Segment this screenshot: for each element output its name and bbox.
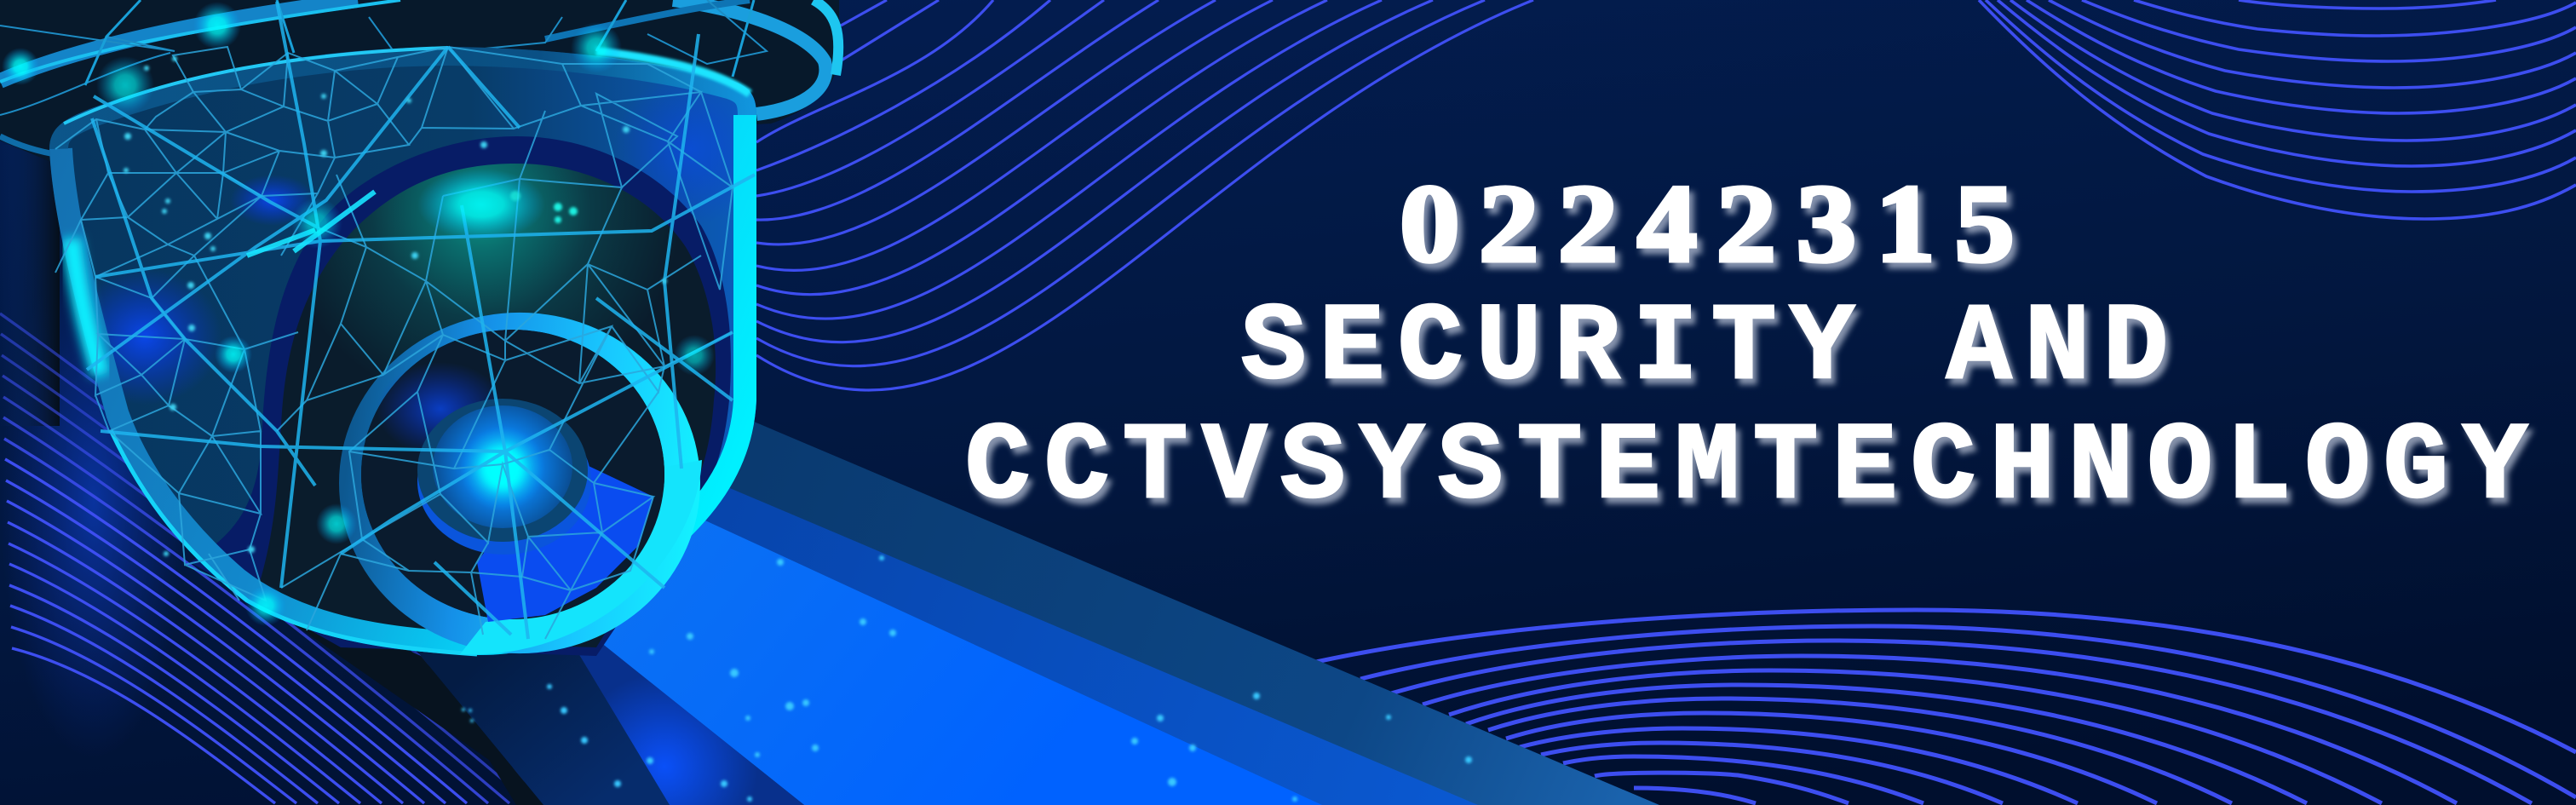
rim side band (49, 115, 756, 655)
title: line 3: CCTVSYSTEMTECHNOLOGY (965, 406, 2528, 530)
lens interior (361, 330, 664, 619)
light beam (201, 391, 1659, 805)
lens ring (339, 313, 700, 653)
lens ring lower crescent (460, 460, 702, 654)
title: line 2: SECURITY AND (1241, 287, 2168, 411)
wave lines: top centre (756, 0, 1533, 390)
glow spots (2, 2, 715, 626)
title: course code: 02242315 (1400, 163, 2015, 285)
camera mount: dark top (0, 0, 839, 162)
body glows (68, 72, 767, 405)
dome body (49, 47, 756, 655)
beam sparkles (462, 555, 1472, 802)
wireframe mesh: thin (55, 47, 733, 639)
lens housing ball (256, 164, 716, 647)
rim top band (49, 47, 756, 149)
wireframe mesh: bright (87, 2, 755, 639)
rim highlights (64, 48, 750, 654)
wave lines: bottom left (0, 313, 616, 803)
mount rings (0, 0, 838, 155)
lens housing ball crescent (190, 136, 731, 656)
left background glow (0, 145, 187, 758)
body sparkles (124, 56, 667, 556)
wave lines: top right (1979, 0, 2576, 219)
wave lines: bottom right (1316, 610, 2576, 803)
icon: CCTV dome camera (0, 0, 838, 656)
